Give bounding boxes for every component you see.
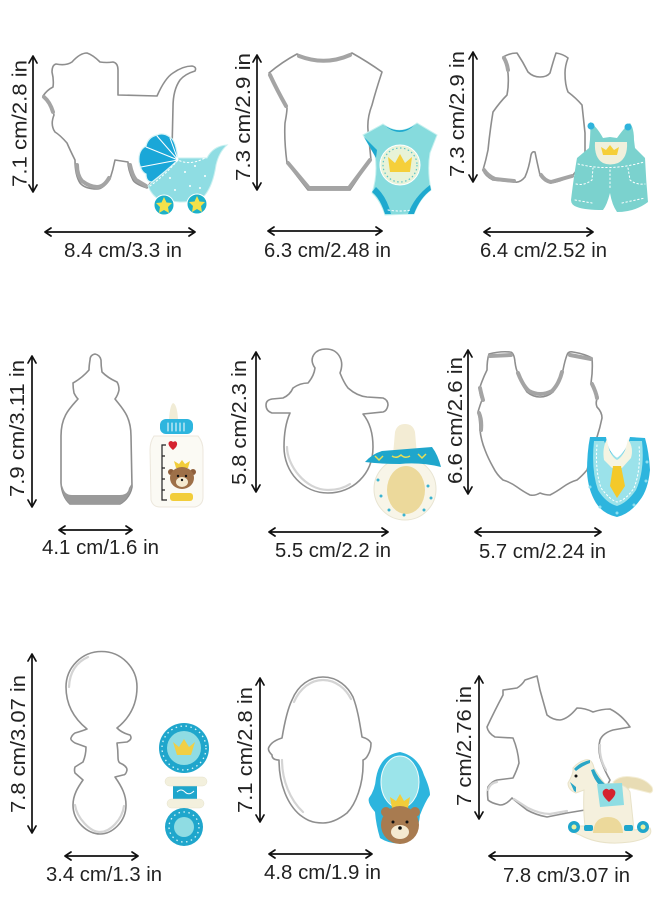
stroller cookie xyxy=(139,134,227,215)
panel: rocking horse cutter xyxy=(453,676,653,887)
shoe cookie xyxy=(369,752,430,844)
label: bottle height: 7.9 cm/3.11 in xyxy=(6,360,29,497)
arrow: bottle height xyxy=(28,356,36,507)
arrow: stroller height xyxy=(29,56,37,192)
label: overalls width: 6.4 cm/2.52 in xyxy=(480,239,607,262)
label: bib height: 6.6 cm/2.6 in xyxy=(444,357,467,484)
shoe cutter outline xyxy=(268,677,371,823)
label: pacifier height: 5.8 cm/2.3 in xyxy=(228,360,251,485)
arrow: bodysuit width xyxy=(268,227,382,235)
arrow: pacifier height xyxy=(252,352,260,492)
bodysuit cookie xyxy=(363,123,437,215)
arrow: bottle width xyxy=(59,526,132,534)
label: rocking horse width: 7.8 cm/3.07 in xyxy=(503,864,630,887)
label: pacifier width: 5.5 cm/2.2 in xyxy=(275,539,391,562)
pacifier cutter outline xyxy=(266,349,388,493)
arrow: rocking horse width xyxy=(489,852,632,860)
arrow: shoe height xyxy=(256,678,264,822)
overalls cutter outline xyxy=(483,53,585,183)
label: shoe width: 4.8 cm/1.9 in xyxy=(264,861,381,884)
arrow: rattle height xyxy=(28,654,36,833)
rocking horse cookie xyxy=(568,760,653,843)
panel: overalls cutter xyxy=(446,51,648,262)
panel: bodysuit cutter xyxy=(232,53,437,262)
label: bib width: 5.7 cm/2.24 in xyxy=(479,540,606,563)
stroller cutter outline xyxy=(43,53,196,189)
label: stroller height: 7.1 cm/2.8 in xyxy=(8,60,32,187)
arrow: rocking horse height xyxy=(475,676,483,819)
arrow: pacifier width xyxy=(269,528,388,536)
arrow: bib width xyxy=(475,528,601,536)
arrow: rattle width xyxy=(65,852,138,860)
bodysuit cutter outline xyxy=(269,53,382,190)
bib cutter outline xyxy=(478,352,602,495)
arrow: overalls width xyxy=(484,228,593,236)
panel: rattle cutter xyxy=(7,652,209,886)
arrow: bodysuit height xyxy=(253,55,261,190)
arrow: stroller width xyxy=(45,228,195,236)
label: bodysuit height: 7.3 cm/2.9 in xyxy=(232,53,255,181)
bottle cutter outline xyxy=(61,354,132,504)
bottle cookie xyxy=(150,403,203,507)
arrow: overalls height xyxy=(469,52,477,182)
panel: baby stroller cutter xyxy=(8,53,227,262)
panel: pacifier cutter xyxy=(228,349,441,562)
panel: bib cutter xyxy=(444,350,650,563)
label: stroller width: 8.4 cm/3.3 in xyxy=(64,239,182,262)
panel: baby shoe cutter xyxy=(234,677,430,884)
rattle cookie xyxy=(159,723,209,846)
overalls cookie xyxy=(571,122,648,212)
label: rattle width: 3.4 cm/1.3 in xyxy=(46,863,162,886)
label: rocking horse height: 7 cm/2.76 in xyxy=(453,686,476,806)
label: bodysuit width: 6.3 cm/2.48 in xyxy=(264,239,391,262)
rocking horse cutter outline xyxy=(487,676,630,817)
rattle cutter outline xyxy=(66,652,137,834)
arrow: shoe width xyxy=(269,850,372,858)
label: overalls height: 7.3 cm/2.9 in xyxy=(446,51,469,177)
pacifier cookie xyxy=(365,424,441,520)
bib cookie xyxy=(587,437,650,517)
arrow: bib height xyxy=(464,350,472,494)
label: rattle height: 7.8 cm/3.07 in xyxy=(7,675,30,813)
label: bottle width: 4.1 cm/1.6 in xyxy=(42,536,159,559)
label: shoe height: 7.1 cm/2.8 in xyxy=(234,687,257,813)
panel: bottle cutter xyxy=(6,354,203,559)
